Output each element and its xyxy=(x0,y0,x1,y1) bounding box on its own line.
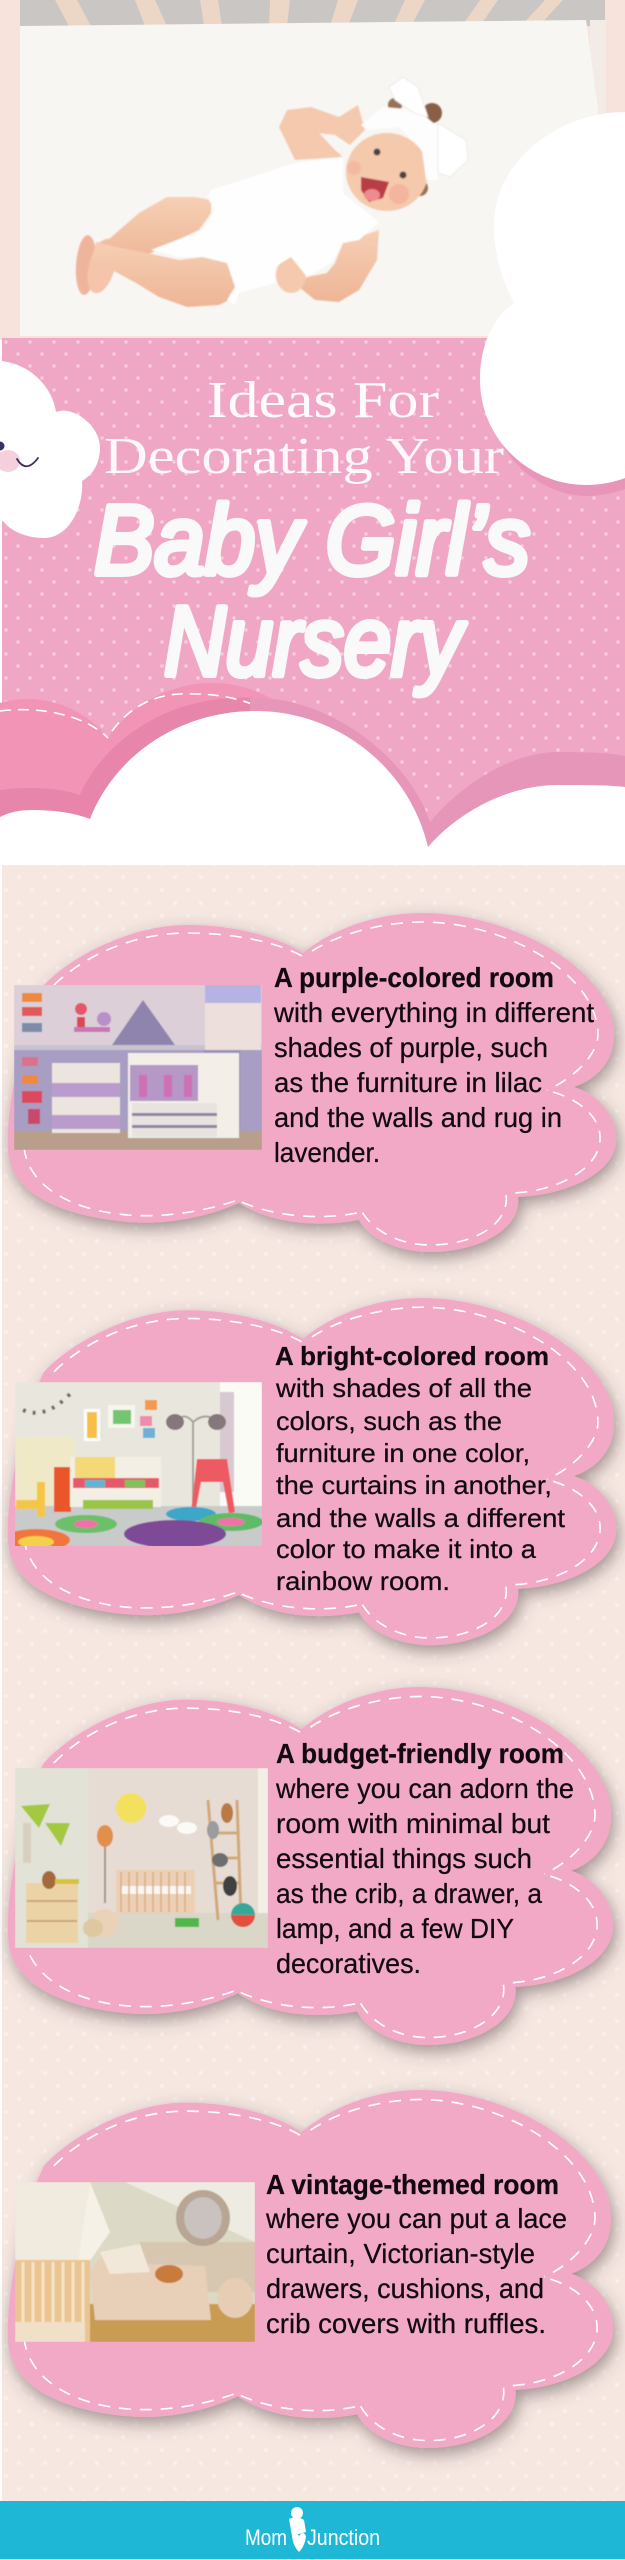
text: bright-colored room: colors, such as the xyxy=(276,1406,502,1436)
eyes xyxy=(374,148,380,156)
footer bar xyxy=(0,2501,625,2559)
headband and bow xyxy=(361,107,438,180)
text: bright-colored room: with shades of all the xyxy=(275,1373,532,1403)
baby lower leg xyxy=(90,242,239,307)
text: budget-friendly room: as the crib, a drawer, a xyxy=(276,1878,542,1909)
text: budget-friendly room: room with minimal but xyxy=(276,1808,550,1839)
baby upper leg xyxy=(96,197,211,263)
baby upper arm xyxy=(279,105,365,160)
photo: bright room xyxy=(15,1382,262,1546)
text: budget-friendly room xyxy=(275,1738,574,1979)
baby feet xyxy=(74,234,98,296)
right white cloud xyxy=(480,112,625,496)
text: budget-friendly room: lamp, and a few DIY xyxy=(276,1913,514,1944)
title: first line: Ideas For xyxy=(207,372,439,429)
text: bright-colored room: color to make it into a xyxy=(276,1534,537,1564)
cloud 4 xyxy=(8,2090,613,2448)
title: second line: Decorating Your xyxy=(104,428,504,485)
shadow band behind bottom white clouds xyxy=(250,698,625,850)
text: vintage-themed room xyxy=(265,2169,567,2339)
panel: budget-friendly room xyxy=(8,1687,613,2045)
pink title banner background xyxy=(2,338,625,868)
photo: vintage room xyxy=(15,2182,255,2342)
text: budget-friendly room: where you can adorn the xyxy=(275,1773,574,1804)
text: vintage-themed room: A vintage-themed room xyxy=(266,2169,559,2200)
logo wordmark left: Mom xyxy=(245,2525,287,2550)
head xyxy=(346,133,428,211)
text: vintage-themed room: curtain, Victorian-style xyxy=(266,2238,535,2269)
text: bright-colored room xyxy=(275,1341,566,1596)
text: budget-friendly room: essential things such xyxy=(276,1843,532,1874)
text: purple-colored room: and the walls and rug in xyxy=(274,1102,562,1133)
mouth xyxy=(361,177,389,202)
text: bright-colored room: furniture in one color, xyxy=(276,1438,530,1468)
bottom pink stitched cloud xyxy=(0,683,300,825)
cloud 2 xyxy=(8,1298,616,1645)
onesie xyxy=(151,157,379,305)
text: purple-colored room: with everything in different xyxy=(273,997,594,1028)
peach dotted background xyxy=(2,865,625,2501)
cloud 3 xyxy=(8,1687,613,2045)
panel: bright-colored room xyxy=(2,1298,616,1645)
panel: purple-colored room xyxy=(8,913,616,1252)
text: vintage-themed room: where you can put a lace xyxy=(265,2203,567,2234)
title: script line Baby Girl's: Baby Girl’s xyxy=(94,485,530,595)
panel: vintage-themed room xyxy=(8,2090,613,2448)
text: purple-colored room: as the furniture in lilac xyxy=(274,1067,542,1098)
left smiling cloud xyxy=(0,361,100,538)
baby lower arm xyxy=(299,230,379,302)
text: purple-colored room: shades of purple, such xyxy=(274,1032,548,1063)
hero photo: baby on crib mattress xyxy=(0,0,625,340)
hair xyxy=(422,103,442,123)
logo wordmark right: Junction xyxy=(307,2525,380,2550)
text: bright-colored room: A bright-colored room xyxy=(275,1341,549,1371)
text: vintage-themed room: crib covers with ruffles. xyxy=(266,2308,546,2339)
bottom white clouds xyxy=(0,711,625,866)
text: purple-colored room: lavender. xyxy=(274,1137,380,1168)
photo: purple room xyxy=(14,985,262,1150)
text: bright-colored room: the curtains in another, xyxy=(276,1470,552,1500)
text: budget-friendly room: decoratives. xyxy=(276,1948,421,1979)
cloud 1 xyxy=(8,913,616,1252)
title: script line Nursery: Nursery xyxy=(164,586,466,696)
baby hand xyxy=(276,257,306,293)
text: purple-colored room: A purple-colored room xyxy=(274,962,554,993)
text: vintage-themed room: drawers, cushions, and xyxy=(266,2273,544,2304)
text: budget-friendly room: A budget-friendly room xyxy=(276,1738,564,1769)
text: purple-colored room xyxy=(273,962,594,1168)
photo: budget room xyxy=(15,1768,268,1948)
logo icon: mother and child xyxy=(289,2507,306,2552)
text: bright-colored room: and the walls a different xyxy=(276,1503,566,1533)
text: bright-colored room: rainbow room. xyxy=(276,1566,450,1596)
